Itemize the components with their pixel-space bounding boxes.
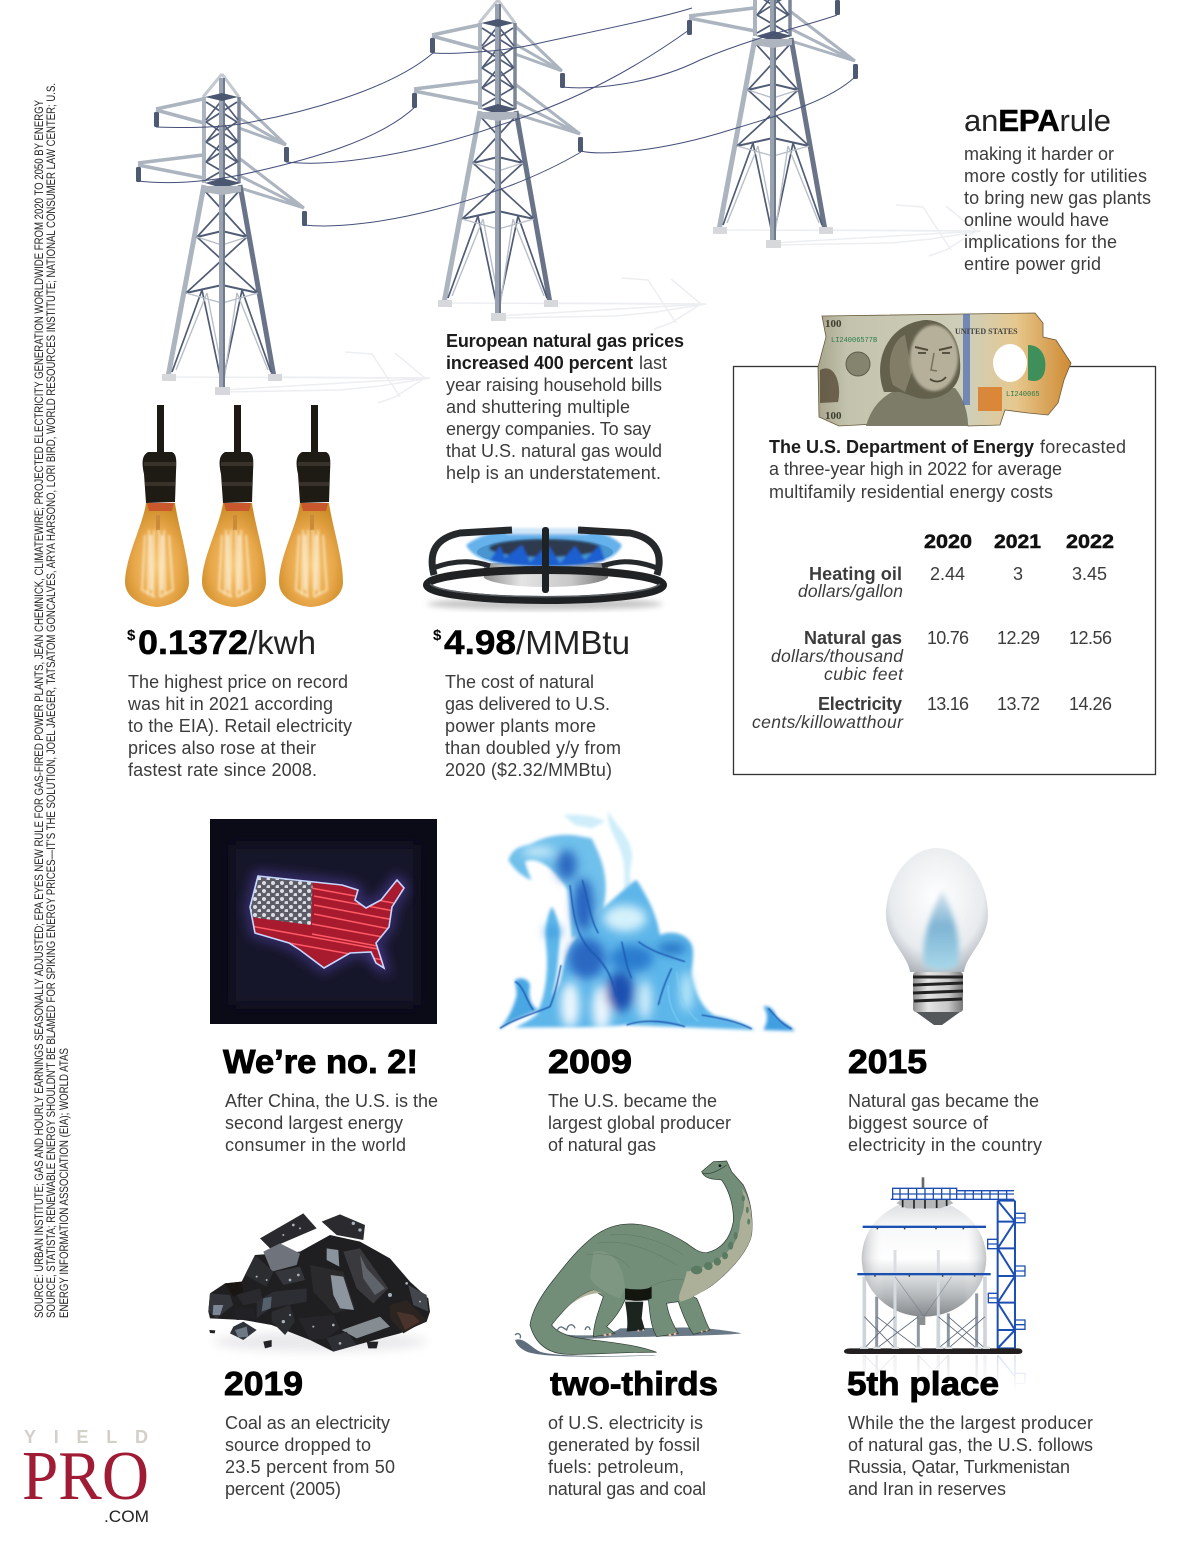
stat: price per MMBtu: than doubled y/y from	[445, 738, 621, 758]
stat: 2009: 2009	[548, 1043, 632, 1080]
stat: price per kwh: was hit in 2021 according	[127, 694, 333, 714]
image: coal pile	[208, 1213, 430, 1352]
table: energy costs by year: cents/killowatthour	[752, 712, 904, 732]
icon: burned hundred dollar bill	[818, 313, 1071, 426]
stat: 2009: The U.S. became the	[548, 1091, 717, 1111]
stat: price per MMBtu: gas delivered to U.S.	[445, 694, 610, 714]
illustration: transmission towers and wires	[136, 0, 981, 403]
table: energy costs by year: 13.72	[997, 694, 1040, 714]
stat: We're no. 2: We’re no. 2!	[223, 1043, 418, 1080]
callout: an EPA rule: implications for the	[964, 232, 1117, 252]
table: energy costs by year: 3.45	[1072, 564, 1107, 584]
stat: price per kwh	[127, 624, 352, 780]
text block: forecast statement: The U.S. Department of Energy	[769, 437, 1034, 457]
stat: price per kwh: 0.1372	[138, 624, 248, 662]
callout: an EPA rule: to bring new gas plants	[964, 188, 1151, 208]
stat: price per MMBtu: 2020 ($2.32/MMBtu)	[445, 760, 612, 780]
image: neon USA flag map	[210, 819, 437, 1024]
text block: European natural gas prices: that U.S. natural gas would	[446, 441, 662, 461]
stat: two-thirds: fuels: petroleum,	[548, 1457, 684, 1477]
stat: 2009	[548, 1043, 731, 1155]
icon: burned hundred dollar bill: UNITED STATES	[955, 327, 1018, 336]
stat: price per kwh: /kwh	[248, 624, 316, 661]
image: blue flame	[498, 812, 795, 1032]
table: energy costs by year: 2022	[1066, 532, 1114, 553]
icon: gas burner	[427, 527, 663, 610]
text block: European natural gas prices	[446, 331, 684, 483]
stat: price per MMBtu	[433, 624, 630, 780]
table: energy costs by year: 12.29	[997, 628, 1040, 648]
stat: 5th place	[847, 1365, 1093, 1499]
stat: 2019: 2019	[224, 1365, 303, 1402]
callout: an EPA rule	[964, 103, 1151, 274]
text block: European natural gas prices: energy companies. To say	[446, 419, 651, 439]
stat: 5th place: While the the largest producer	[848, 1413, 1093, 1433]
text block: forecast statement: a three-year high in 2022 for average	[769, 459, 1062, 479]
stat: 2019: Coal as an electricity	[225, 1413, 390, 1433]
stat: price per MMBtu: $	[433, 627, 442, 644]
text block: European natural gas prices: last	[639, 353, 667, 373]
table: energy costs by year: 13.16	[927, 694, 969, 714]
logo: Yield Pro .com: .COM	[104, 1507, 149, 1526]
table: energy costs by year: 12.56	[1069, 628, 1112, 648]
text block: forecast statement: forecasted	[1040, 437, 1126, 457]
stat: 5th place: of natural gas, the U.S. follows	[848, 1435, 1093, 1455]
stat: 2019: 23.5 percent from 50	[225, 1457, 395, 1477]
callout: an EPA rule: entire power grid	[964, 254, 1101, 274]
text block: forecast statement: multifamily residential energy costs	[769, 482, 1053, 502]
stat: 2015: Natural gas became the	[848, 1091, 1039, 1111]
stat: price per MMBtu: 4.98	[444, 624, 516, 662]
stat: 2015	[848, 1043, 1042, 1155]
stat: price per kwh: $	[127, 627, 136, 644]
table: energy costs by year: Electricity	[818, 694, 902, 714]
table: energy costs by year: 10.76	[927, 628, 969, 648]
source note: ENERGY INFORMATION ASSOCIATION (EIA); WORLD ATAS	[57, 1048, 71, 1318]
stat: two-thirds: generated by fossil	[548, 1435, 700, 1455]
logo: Yield Pro .com: YIELD	[24, 1427, 148, 1447]
icon: light bulb with blue flame	[886, 848, 988, 1025]
stat: We're no. 2	[223, 1043, 438, 1155]
stat: We're no. 2: After China, the U.S. is the	[225, 1091, 438, 1111]
text block: European natural gas prices: and shuttering multiple	[446, 397, 630, 417]
callout: an EPA rule: more costly for utilities	[964, 166, 1147, 186]
stat: two-thirds: two-thirds	[550, 1365, 718, 1402]
table: energy costs by year: 2020	[924, 532, 972, 553]
stat: two-thirds: natural gas and coal	[548, 1479, 706, 1499]
text block: European natural gas prices: European natural gas prices	[446, 331, 684, 351]
panel border	[734, 366, 1156, 774]
panel: Department of Energy forecast	[734, 313, 1156, 774]
table: energy costs by year: dollars/thousand	[771, 646, 904, 666]
stat: two-thirds	[548, 1365, 718, 1499]
stat: price per kwh: fastest rate since 2008.	[128, 760, 317, 780]
stat: We're no. 2: second largest energy	[225, 1113, 403, 1133]
stat: 5th place: 5th place	[847, 1365, 999, 1402]
icon: burned hundred dollar bill: 100	[825, 318, 842, 330]
stat: price per kwh: prices also rose at their	[128, 738, 316, 758]
text block: European natural gas prices: increased 400 percent	[446, 353, 633, 373]
source note	[32, 83, 71, 1318]
stat: 2009: largest global producer	[548, 1113, 731, 1133]
stat: price per kwh: to the EIA). Retail electricity	[128, 716, 352, 736]
text block: European natural gas prices: help is an understatement.	[446, 463, 661, 483]
stat: price per MMBtu: The cost of natural	[445, 672, 594, 692]
stat: We're no. 2: consumer in the world	[225, 1135, 406, 1155]
table: energy costs by year: 14.26	[1069, 694, 1112, 714]
table: energy costs by year: 2021	[994, 532, 1041, 553]
icon: burned hundred dollar bill: LI24006577B	[831, 337, 877, 345]
stat: 5th place: and Iran in reserves	[848, 1479, 1006, 1499]
stat: 2015: 2015	[848, 1043, 927, 1080]
stat: 2015: biggest source of	[848, 1113, 989, 1133]
table: energy costs by year: dollars/gallon	[798, 581, 903, 601]
image: brontosaurus	[515, 1161, 752, 1357]
table: energy costs by year: 3	[1013, 564, 1023, 584]
stat: price per MMBtu: power plants more	[445, 716, 596, 736]
text block: forecast statement	[769, 437, 1126, 502]
stat: 5th place: Russia, Qatar, Turkmenistan	[848, 1457, 1070, 1477]
table: energy costs by year	[752, 532, 1114, 732]
stat: two-thirds: of U.S. electricity is	[548, 1413, 703, 1433]
text block: European natural gas prices: year raising household bills	[446, 375, 662, 395]
callout: an EPA rule: anEPArule	[964, 103, 1111, 138]
callout: an EPA rule: making it harder or	[964, 144, 1114, 164]
stat: price per kwh: The highest price on record	[128, 672, 348, 692]
icon: three vintage light bulbs	[125, 405, 343, 607]
icon: burned hundred dollar bill: 100	[825, 410, 842, 422]
image: spherical gas storage tank	[843, 1177, 1030, 1393]
callout: an EPA rule: online would have	[964, 210, 1109, 230]
stat: price per MMBtu: /MMBtu	[516, 624, 630, 661]
table: energy costs by year: Natural gas	[804, 628, 902, 648]
stat: 2015: electricity in the country	[848, 1135, 1042, 1155]
stat: 2009: of natural gas	[548, 1135, 656, 1155]
icon: burned hundred dollar bill: LI240065	[1006, 391, 1040, 399]
logo: Yield Pro .com: PRO	[22, 1438, 149, 1515]
stat: 2019: percent (2005)	[225, 1479, 341, 1499]
table: energy costs by year: 2.44	[930, 564, 965, 584]
table: energy costs by year: Heating oil	[809, 564, 902, 584]
table: energy costs by year: cubic feet	[824, 664, 904, 684]
stat: 2019	[224, 1365, 395, 1499]
stat: 2019: source dropped to	[225, 1435, 371, 1455]
